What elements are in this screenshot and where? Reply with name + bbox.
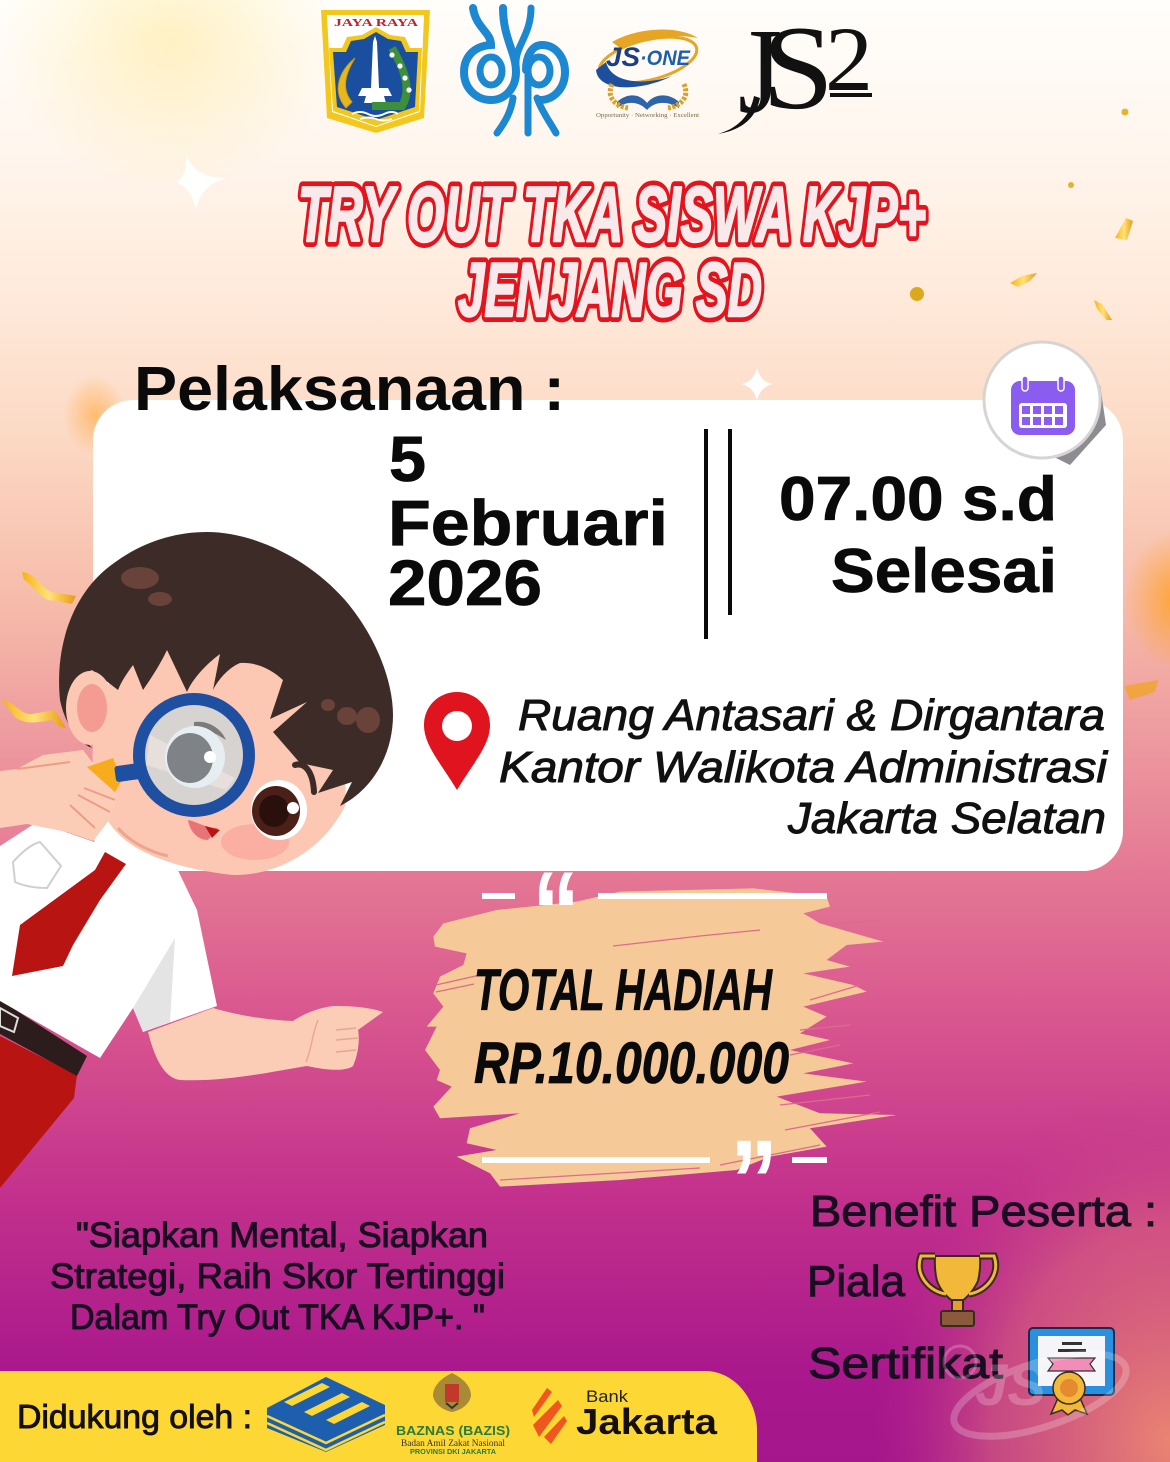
quote bars and marks: “ [532,849,580,977]
icon: calendar badge [984,342,1106,465]
title [298,170,926,333]
date text [388,423,668,619]
location text: Jakarta Selatan [787,794,1106,843]
watermark: JS [975,1353,1046,1418]
logo: blue stacked blocks [267,1377,385,1452]
title: JENJANG SD [458,248,762,333]
location text: Kantor Walikota Administrasi [499,743,1108,792]
logo: BAZNAS: Badan Amil Zakat Nasional [401,1438,506,1448]
location text [499,691,1108,843]
illustration: boy with magnifying glass [0,532,393,1188]
icon: trophy [919,1256,996,1326]
supporters label: Didukung oleh : [17,1398,252,1435]
quote text: "Siapkan Mental, Siapkan [76,1216,488,1255]
logo: Jakarta crest: JAYA RAYA [334,17,418,29]
prize text: RP.10.000.000 [474,1031,789,1096]
vertical dividers [704,429,732,639]
logo: JS-ONE: ·ONE [640,47,691,70]
logo: BAZNAS: PROVINSI DKI JAKARTA [410,1449,496,1456]
banner: total hadiah brush stroke [425,849,897,1245]
prize text: TOTAL HADIAH [474,958,773,1023]
panel: schedule and location [93,342,1123,871]
date text: 2026 [388,547,542,619]
logo: JS2: S [762,1,834,134]
logo: Bank Jakarta [532,1387,718,1444]
logo: Bank Jakarta: Jakarta [576,1401,718,1442]
quote text: Dalam Try Out TKA KJP+. " [70,1298,485,1337]
benefit heading: Benefit Peserta : [810,1187,1157,1236]
benefit: sertifikat: Sertifikat [808,1339,1003,1388]
logo: JS-ONE: JS [606,42,640,72]
time text: 07.00 s.d [779,465,1057,534]
logo: BAZNAS: BAZNAS (BAZIS) [396,1423,510,1438]
icon: certificate [1029,1328,1114,1415]
time text [779,465,1057,606]
quote text [50,1216,505,1337]
benefit: piala: Piala [807,1257,906,1306]
panel: supporters [0,1371,757,1462]
date text: 5 [389,423,426,495]
title: JENJANG SD [458,248,762,333]
prize text [474,958,789,1096]
logo: KJP [464,8,565,133]
logo: Bank Jakarta: Bank [586,1387,629,1406]
location text: Ruang Antasari & Dirgantara [518,691,1105,740]
logo: JS2 [718,1,873,139]
quote text: Strategi, Raih Skor Tertinggi [50,1257,505,1296]
confetti decorations [2,108,1158,728]
quote bars and marks [482,849,827,1245]
logo: JS-ONE: Opportunity · Networking · Excellent [596,112,699,119]
boy body and arm [0,822,383,1188]
heading: Pelaksanaan: Pelaksanaan : [134,355,565,424]
boy left hand [0,750,117,841]
date text: Februari [388,487,668,559]
logo: JS2: J [738,4,782,139]
icon: location pin [424,692,490,790]
logo: BAZNAS [396,1373,510,1456]
boy head [59,532,393,875]
logo: JS-ONE [595,28,701,119]
magnifying glass [87,693,255,817]
sparkle stars [176,155,773,400]
logo: Jakarta crest [321,10,430,133]
quote bars and marks: ” [730,1117,778,1245]
panel: benefit peserta [807,1187,1157,1415]
logo: JS2: 2 [825,8,873,110]
time text: Selesai [831,537,1057,606]
watermark [944,1337,1135,1453]
